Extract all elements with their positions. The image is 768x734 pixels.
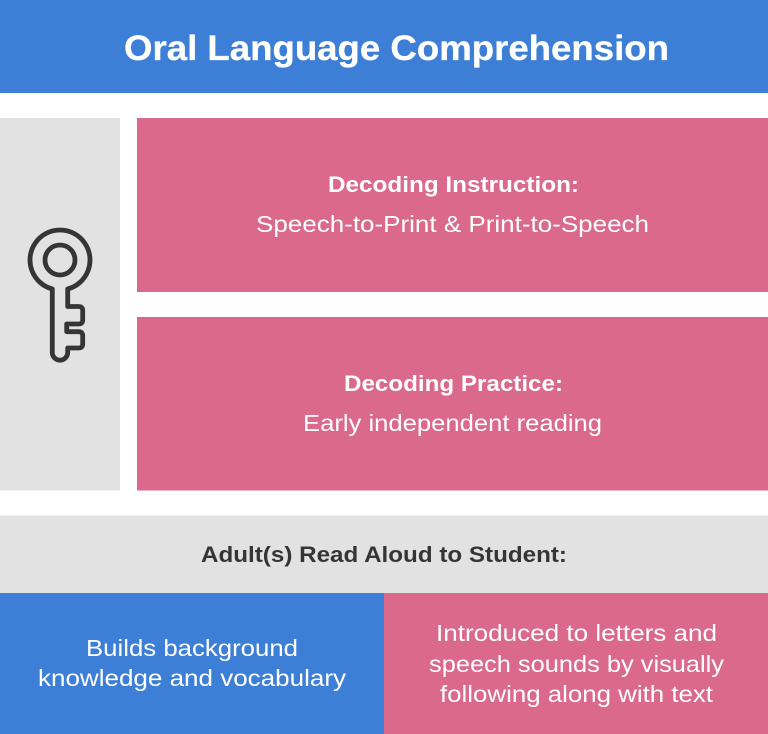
text: builds background knowledge: Builds background: [86, 635, 298, 661]
heading: decoding practice: Decoding Practice:: [344, 371, 563, 396]
text: early independent reading: Early independent reading: [303, 410, 602, 436]
panel: letters and sounds: [384, 593, 768, 734]
heading: decoding instruction: Decoding Instruction:: [328, 172, 579, 197]
text: introduced to letters: speech sounds by visually: [429, 651, 724, 677]
panel: background knowledge: [0, 593, 384, 734]
panel: key icon: [0, 118, 120, 490]
text: builds background knowledge: [38, 635, 346, 691]
text: introduced to letters: following along with text: [440, 681, 714, 707]
panel: decoding practice: [137, 317, 768, 490]
icon: key: [30, 230, 90, 360]
panel: decoding instruction: [137, 118, 768, 292]
title: Oral Language Comprehension: [124, 29, 669, 68]
panel: read aloud header: [0, 516, 768, 593]
text: introduced to letters: Introduced to letters and: [436, 620, 717, 646]
text: builds background knowledge: knowledge and vocabulary: [38, 665, 346, 691]
title banner: [0, 0, 768, 93]
text: introduced to letters: [429, 620, 724, 707]
heading: read aloud: Adult(s) Read Aloud to Student:: [201, 542, 567, 567]
text: speech to print: Speech-to-Print & Print-to-Speech: [256, 211, 649, 237]
